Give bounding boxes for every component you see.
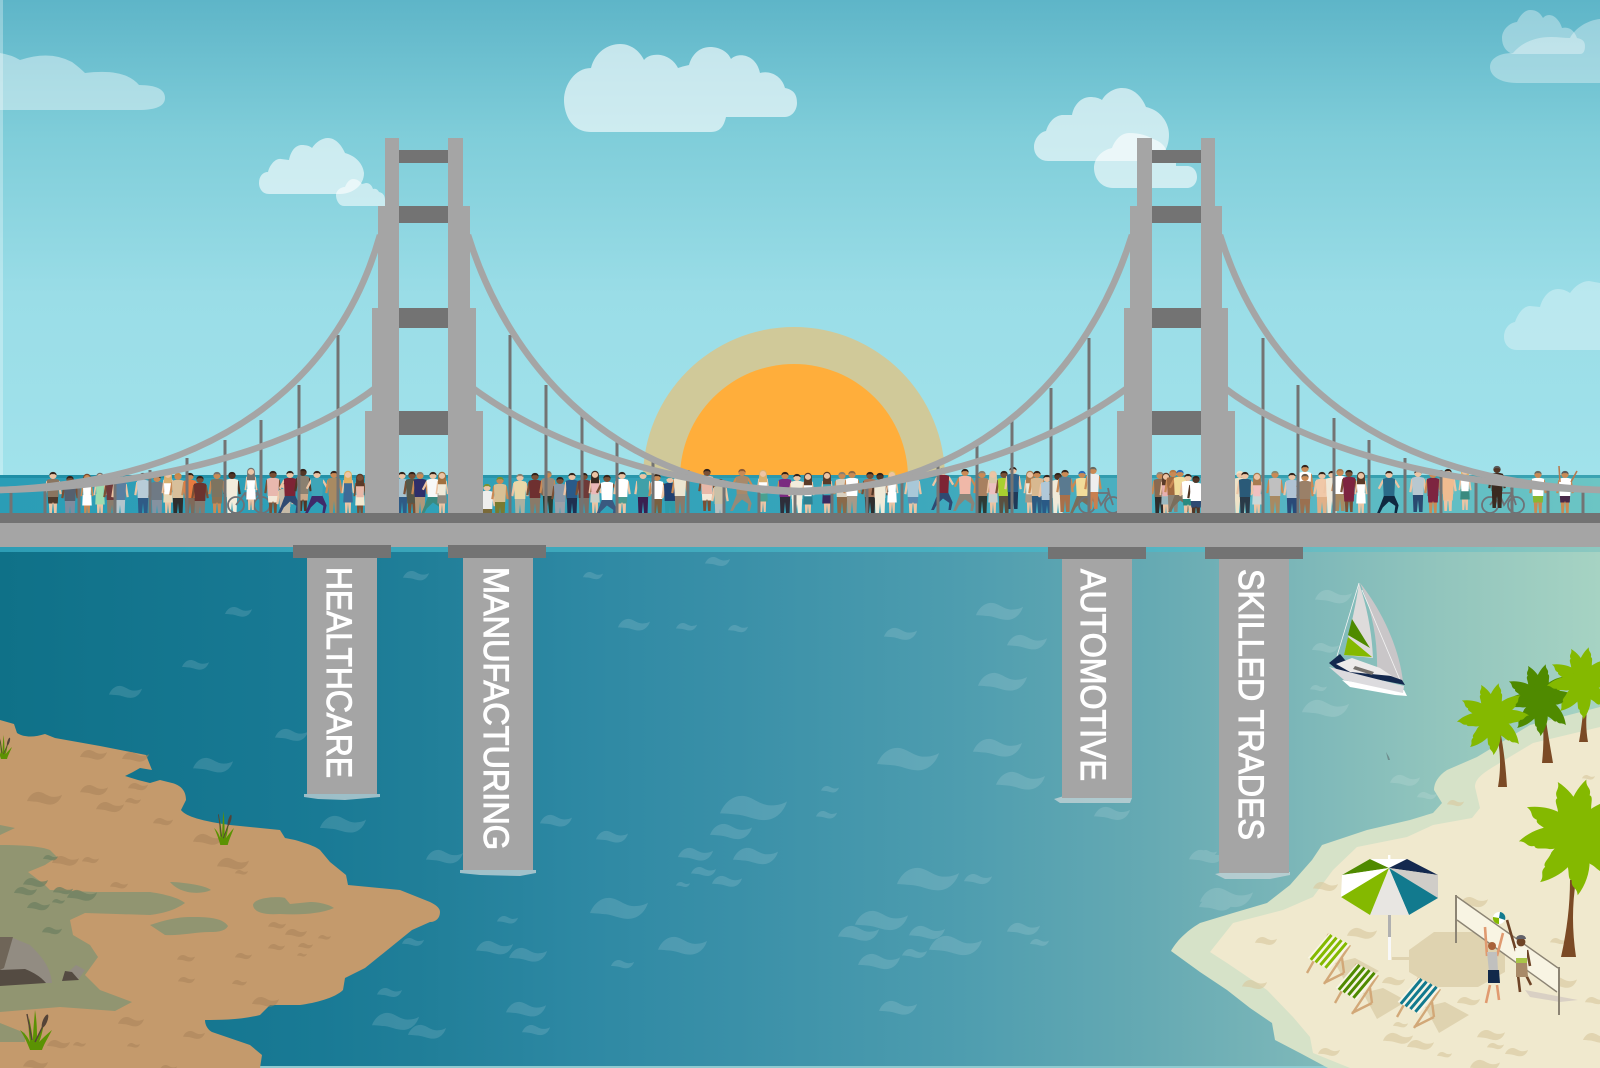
pillar: healthcare [293,545,391,800]
beach ripples [1242,775,1600,1068]
right shore: tropical beach [1171,646,1600,1068]
icon: reeds shore [214,811,234,845]
palm: large foreground [1517,777,1600,957]
cloud: large centre [564,44,797,132]
swamp ripples [14,855,97,934]
cloud: top left [0,53,165,110]
volleyball players and ball [1485,912,1531,1003]
shallow foam [1171,707,1600,1068]
left shore: barren land [0,720,440,1068]
left bridge tower [365,138,483,513]
cloud: right middle [1504,281,1600,350]
deck chair teal [1397,978,1469,1033]
palm: left [1456,682,1529,787]
small distant object [1386,752,1390,760]
cloud: behind right tower [1034,88,1169,161]
water ripples [109,557,1437,1039]
sand [1210,727,1600,1068]
right bridge tower [1117,138,1235,513]
cloud: front of right tower [1094,133,1197,188]
suspension cables [0,235,1600,492]
beach umbrella [1341,855,1438,960]
pillar: manufacturing: MANUFACTURING [476,567,515,850]
icon: reeds edge [0,735,12,759]
sailboat [1329,583,1407,696]
cloud: small front of left tower [336,179,385,206]
pillar: automotive: AUTOMOTIVE [1073,569,1112,781]
icon: reeds large [20,1010,52,1050]
pillar: healthcare: HEALTHCARE [319,567,358,778]
water [0,546,1600,1068]
pillar: automotive [1048,547,1146,803]
pillar: skilled trades [1205,547,1303,879]
bridge hangers [11,335,1583,513]
cloud: top right back [1502,10,1585,54]
crowd crossing the bridge [45,465,1577,526]
pillar: skilled trades: SKILLED TRADES [1231,569,1270,840]
sky background [0,0,1600,476]
sand ripples [23,750,331,1068]
clouds [0,10,1600,350]
bridge deck [0,513,1600,547]
cloud: top right front [1490,19,1600,83]
setting sun [643,327,945,629]
cloud: small beside left tower [259,138,364,194]
deck chair dark green [1335,964,1407,1019]
deck chair green [1307,934,1379,989]
palm: right [1546,646,1600,742]
pillar: manufacturing [448,545,546,876]
palm: dark back [1503,663,1576,763]
rocks [0,937,85,986]
distant sea [0,475,1600,515]
swamp patches [0,825,334,1042]
sand land mass [0,720,440,1068]
umbrella shadow [1392,932,1505,987]
volleyball net [1456,895,1578,1015]
